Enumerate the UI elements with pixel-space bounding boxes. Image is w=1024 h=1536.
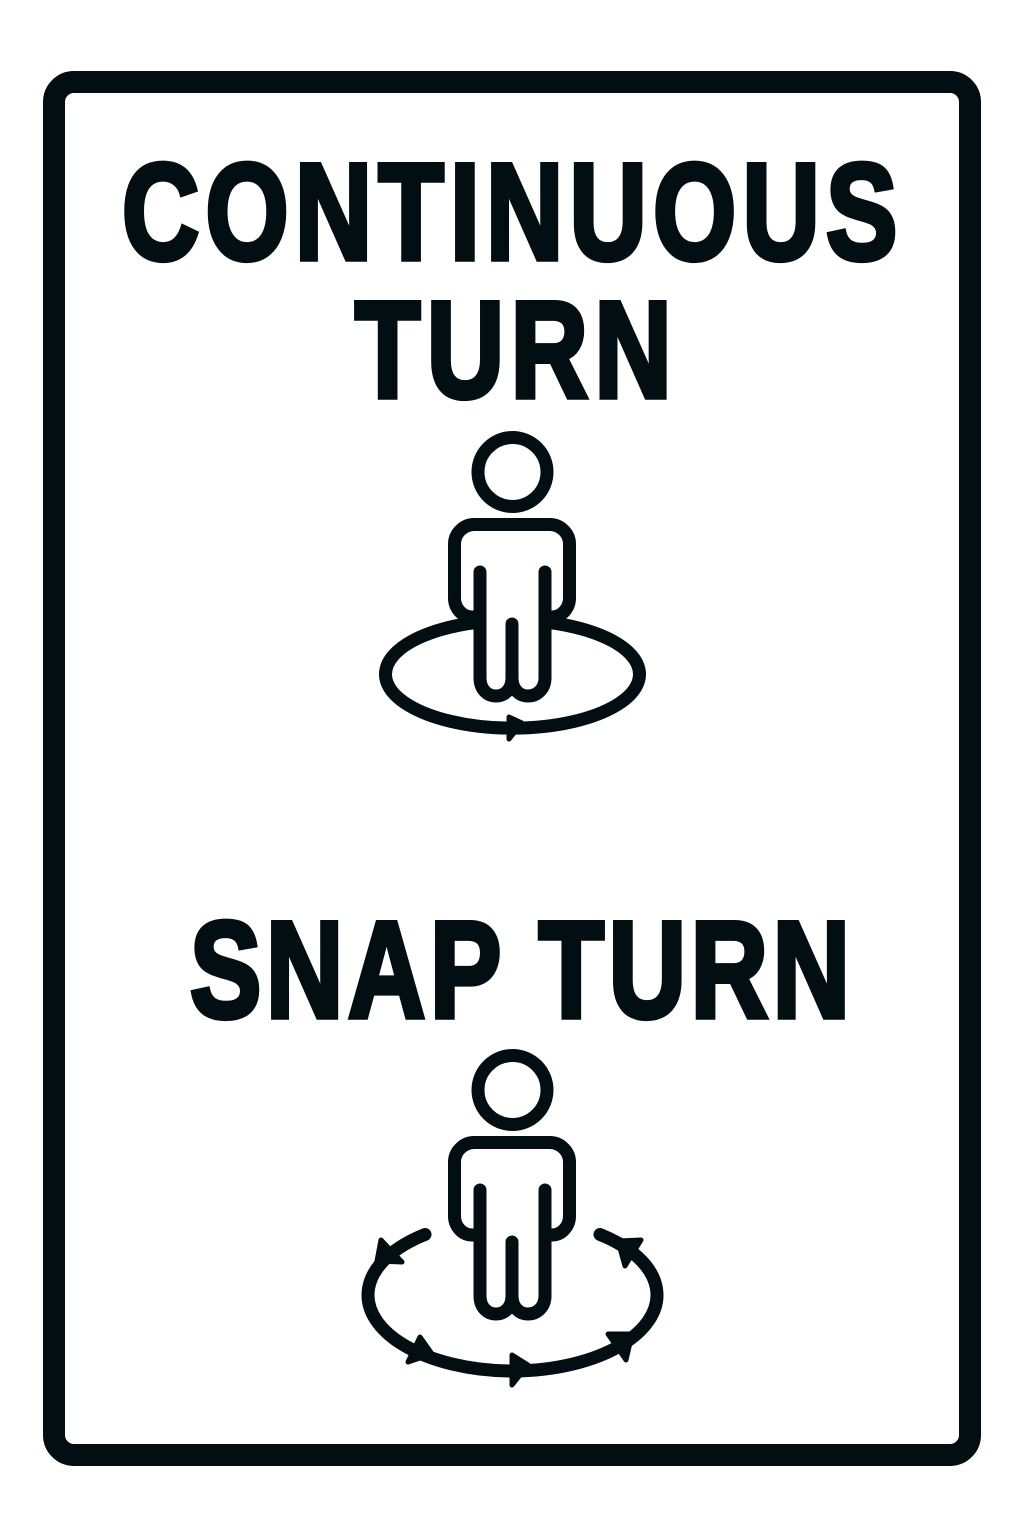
icon: person on continuous circular path [386,438,640,739]
heading: continuous turn [122,136,897,427]
head [478,438,547,506]
body and legs [454,524,570,696]
arrowhead [509,717,522,739]
heading: continuous turn: CONTINUOUS [122,136,897,289]
arrowheads [377,1240,641,1385]
sign border frame [54,82,970,1455]
segmented circular path [368,1234,657,1371]
circular path [386,622,640,728]
icon: person with snap turn arrows [368,1056,657,1385]
heading: continuous turn: TURN [355,274,672,427]
head [478,1056,547,1124]
heading: snap turn: SNAP TURN [190,894,850,1047]
body and legs [454,1142,570,1314]
